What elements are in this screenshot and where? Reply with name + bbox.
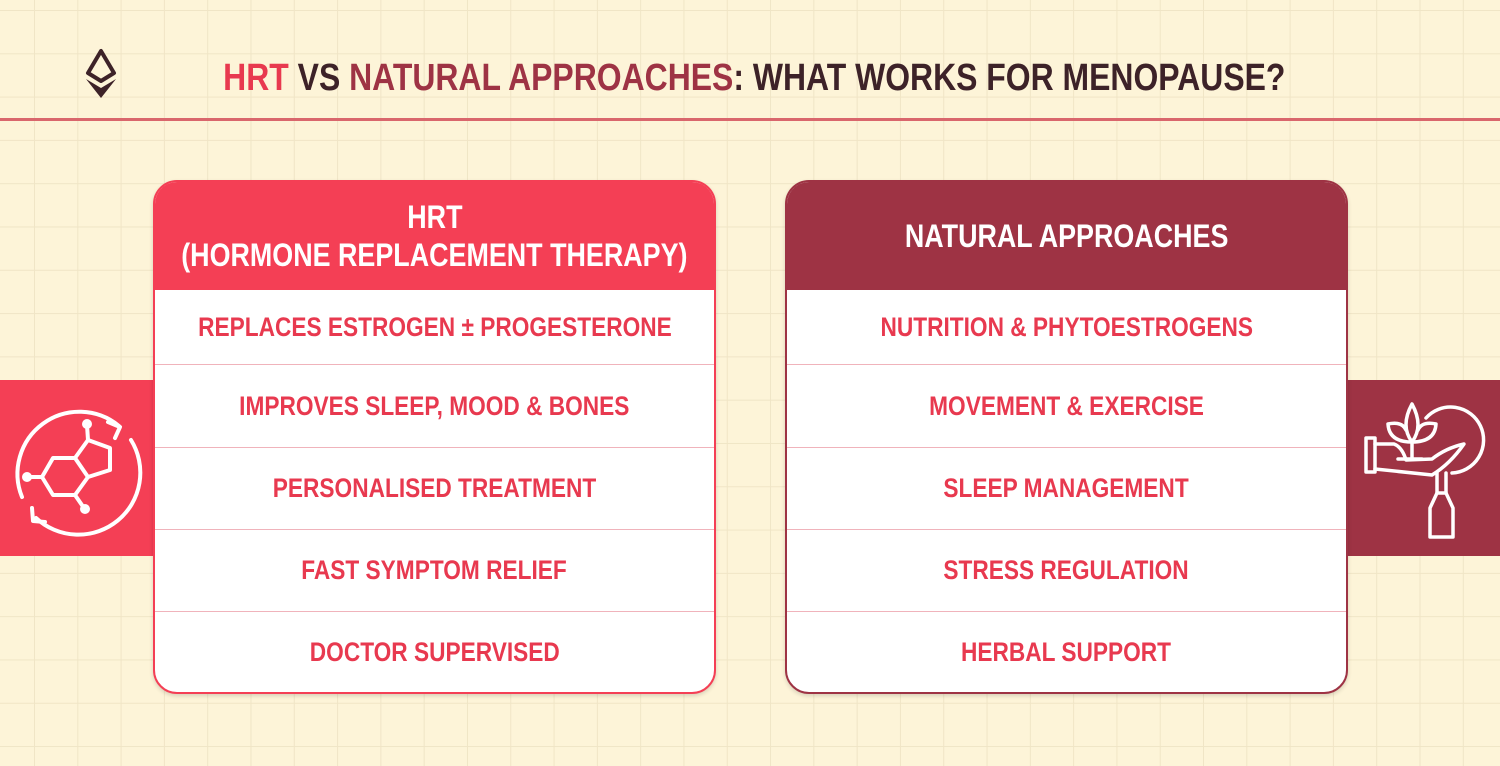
panel: HRT: REPLACES ESTROGEN ± PROGESTERONE — [198, 312, 671, 342]
panel: natural approaches: MOVEMENT & EXERCISE — [929, 390, 1204, 420]
panel: natural approaches: NUTRITION & PHYTOESTROGENS — [880, 312, 1253, 342]
heading: natural approaches: NATURAL APPROACHES — [905, 218, 1228, 254]
heading: HRT: (HORMONE REPLACEMENT THERAPY) — [181, 237, 688, 273]
heading: HRT — [155, 182, 714, 290]
heading: HRT: HRT — [407, 199, 462, 235]
left band with molecule icon — [0, 380, 160, 556]
logo icon — [86, 48, 116, 98]
panel: HRT: IMPROVES SLEEP, MOOD & BONES — [239, 390, 630, 420]
heading: natural approaches — [787, 182, 1346, 290]
panel: natural approaches: HERBAL SUPPORT — [961, 637, 1172, 667]
panel: natural approaches — [785, 180, 1348, 694]
panel: natural approaches: STRESS REGULATION — [944, 555, 1189, 585]
panel: HRT: PERSONALISED TREATMENT — [273, 473, 596, 503]
panel: HRT: DOCTOR SUPERVISED — [310, 637, 559, 667]
right band with herbal icon — [1347, 380, 1500, 556]
panel: HRT: FAST SYMPTOM RELIEF — [302, 555, 567, 585]
panel: HRT — [153, 180, 716, 694]
title: HRT VS NATURAL APPROACHES: WHAT WORKS FOR MENOPAUSE? — [223, 57, 1285, 99]
panel: natural approaches: SLEEP MANAGEMENT — [944, 473, 1189, 503]
